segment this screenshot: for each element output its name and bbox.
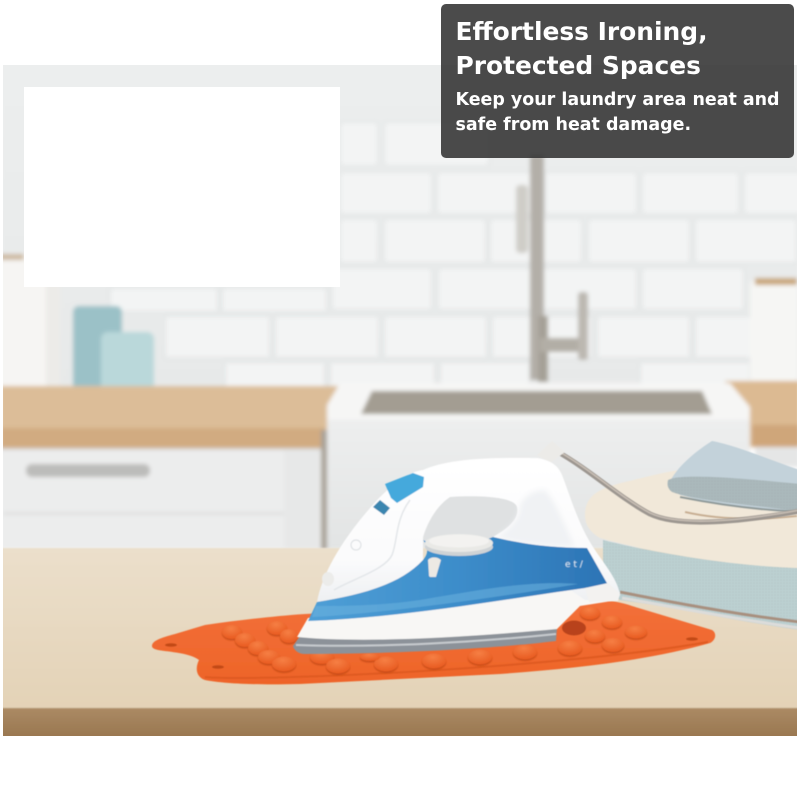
steam slider bbox=[428, 557, 441, 577]
mat holes bbox=[165, 637, 698, 669]
handle opening bbox=[424, 537, 493, 541]
bottom towel bbox=[603, 540, 800, 630]
blank white box bbox=[24, 87, 340, 287]
soleplate bbox=[293, 628, 557, 654]
white base bbox=[296, 589, 620, 640]
blue water tank bbox=[308, 537, 608, 621]
steam iron: e t / bbox=[565, 560, 584, 570]
title: Effortless Ironing, bbox=[456, 17, 708, 46]
subway tile rows bbox=[113, 177, 796, 385]
headline panel bbox=[441, 4, 794, 158]
mat bumps bbox=[222, 606, 647, 674]
blue spray buttons bbox=[385, 473, 424, 503]
title: Protected Spaces bbox=[456, 51, 701, 80]
subtitle: safe from heat damage. bbox=[456, 115, 691, 135]
orange heat mat bbox=[152, 600, 715, 684]
title bbox=[456, 17, 708, 80]
middle towel bbox=[585, 470, 800, 568]
rear column highlight bbox=[504, 491, 570, 545]
kitchen background bbox=[0, 60, 800, 550]
counter right bbox=[725, 381, 800, 447]
rear white heel bbox=[585, 583, 620, 602]
temperature dial bbox=[425, 544, 494, 557]
canisters bbox=[0, 254, 798, 394]
subtitle bbox=[456, 90, 780, 135]
steam iron bbox=[293, 458, 620, 654]
subtitle: Keep your laundry area neat and bbox=[456, 90, 780, 110]
spray nozzle bbox=[322, 572, 334, 586]
top towel bbox=[668, 441, 800, 512]
nose crease bbox=[334, 500, 410, 590]
faucet bbox=[516, 155, 588, 382]
towel stack bbox=[585, 441, 800, 630]
counter left bbox=[3, 384, 339, 432]
iron cord bbox=[560, 452, 797, 526]
iron body bbox=[317, 458, 620, 602]
sink bbox=[327, 383, 750, 425]
wooden table bbox=[0, 548, 800, 738]
